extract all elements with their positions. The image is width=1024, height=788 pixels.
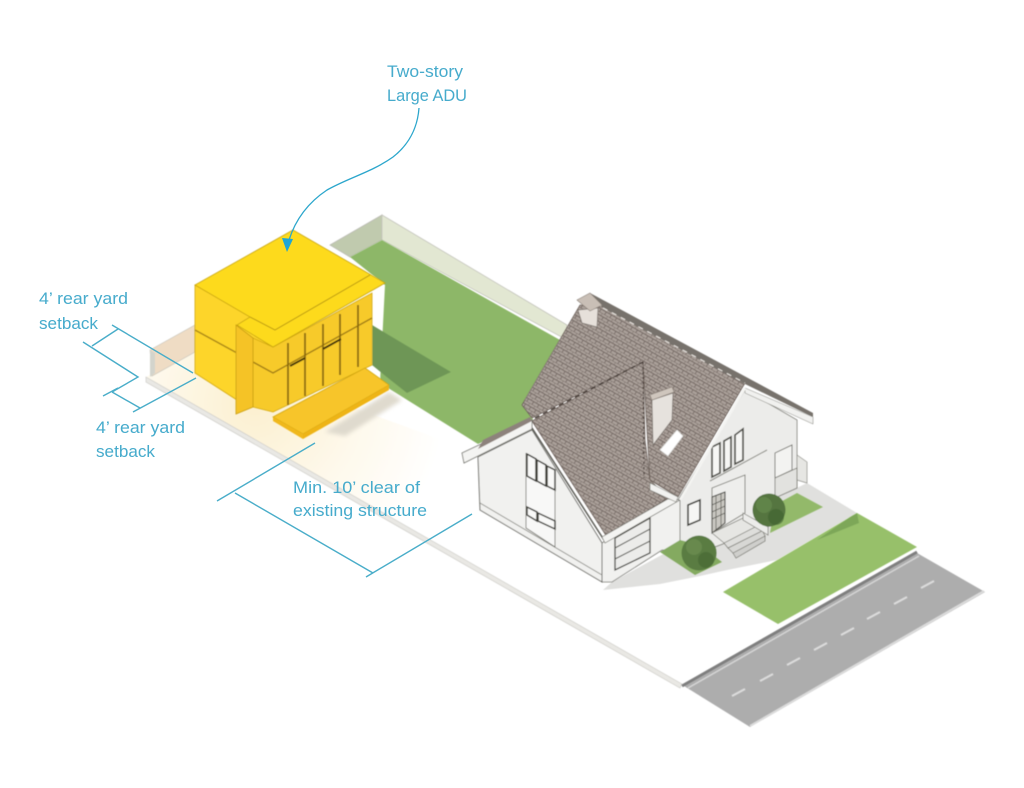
label: rear yard setback upper bbox=[39, 289, 128, 333]
gable wall bbox=[478, 430, 602, 582]
house right wall bbox=[678, 390, 797, 560]
entry bay bbox=[712, 475, 745, 533]
ADU deck bbox=[273, 368, 389, 434]
garage door bbox=[615, 518, 650, 570]
callout: ADU label: Large ADU bbox=[387, 86, 467, 105]
shrub right bbox=[752, 494, 786, 526]
rear roof plane bbox=[522, 305, 745, 497]
lot base and rear walls bbox=[146, 215, 682, 688]
label: minimum clearance: existing structure bbox=[293, 501, 427, 520]
label: rear yard setback lower bbox=[96, 418, 185, 461]
callout: ADU label bbox=[387, 62, 467, 105]
label: minimum clearance: Min. 10’ clear of bbox=[293, 478, 420, 497]
door bbox=[712, 492, 725, 533]
skylight bbox=[660, 430, 683, 456]
walkway and driveway bbox=[603, 483, 857, 590]
label: minimum clearance bbox=[293, 478, 427, 520]
garage wall bbox=[602, 500, 680, 582]
two-story ADU bbox=[195, 230, 389, 439]
ADU fin wall bbox=[236, 325, 253, 414]
dimension: clearance lines bbox=[217, 443, 472, 577]
fence bbox=[797, 455, 807, 483]
upper windows bbox=[712, 429, 743, 477]
label: rear yard setback upper: setback bbox=[39, 314, 98, 333]
house bbox=[462, 293, 823, 582]
callout: ADU label: Two-story bbox=[387, 62, 464, 81]
ADU side wall bbox=[195, 285, 275, 400]
side garden bed bbox=[770, 493, 823, 533]
arrow: to ADU roof bbox=[282, 108, 419, 252]
dimension: rear yard setback lines bbox=[83, 325, 196, 412]
small window bbox=[688, 500, 700, 525]
ridge and right eave bbox=[590, 293, 813, 417]
ADU shadow on lot bbox=[325, 392, 402, 436]
label: rear yard setback lower: 4’ rear yard bbox=[96, 418, 185, 437]
ADU front wall bbox=[253, 293, 372, 412]
rear chimney bbox=[577, 293, 602, 327]
road centre dashes bbox=[732, 581, 934, 696]
ADU roof bbox=[195, 230, 385, 347]
entry steps bbox=[712, 513, 768, 558]
label: rear yard setback lower: setback bbox=[96, 442, 155, 461]
back lawn bbox=[350, 240, 560, 444]
gable windows bbox=[527, 454, 555, 529]
shrub left bbox=[682, 536, 716, 570]
label: rear yard setback upper: 4’ rear yard bbox=[39, 289, 128, 308]
street bbox=[682, 552, 985, 727]
front chimney bbox=[650, 387, 674, 445]
right annex bbox=[775, 445, 792, 478]
front gable eave bbox=[462, 420, 532, 463]
front lawn bbox=[723, 513, 917, 624]
front gable roof plane bbox=[532, 362, 668, 537]
bed under front shrub bbox=[660, 540, 722, 575]
